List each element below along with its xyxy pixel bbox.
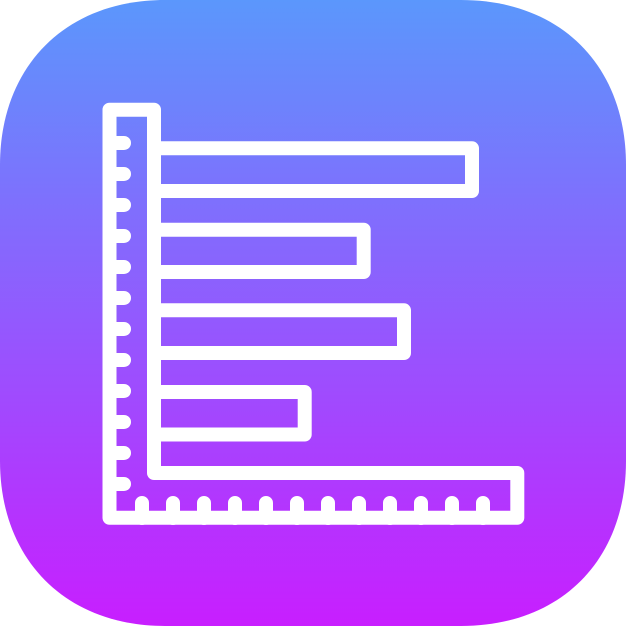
bar 2: [154, 230, 364, 272]
horizontal ruler tick marks: [142, 503, 483, 518]
vertical ruler tick marks: [110, 143, 124, 484]
bar 4: [154, 392, 305, 434]
icon: L-shaped ruler axes with chart bars: [110, 110, 517, 518]
bar 3: [154, 310, 404, 353]
L-shaped ruler outline: [110, 110, 517, 518]
bar 1: [154, 148, 472, 191]
